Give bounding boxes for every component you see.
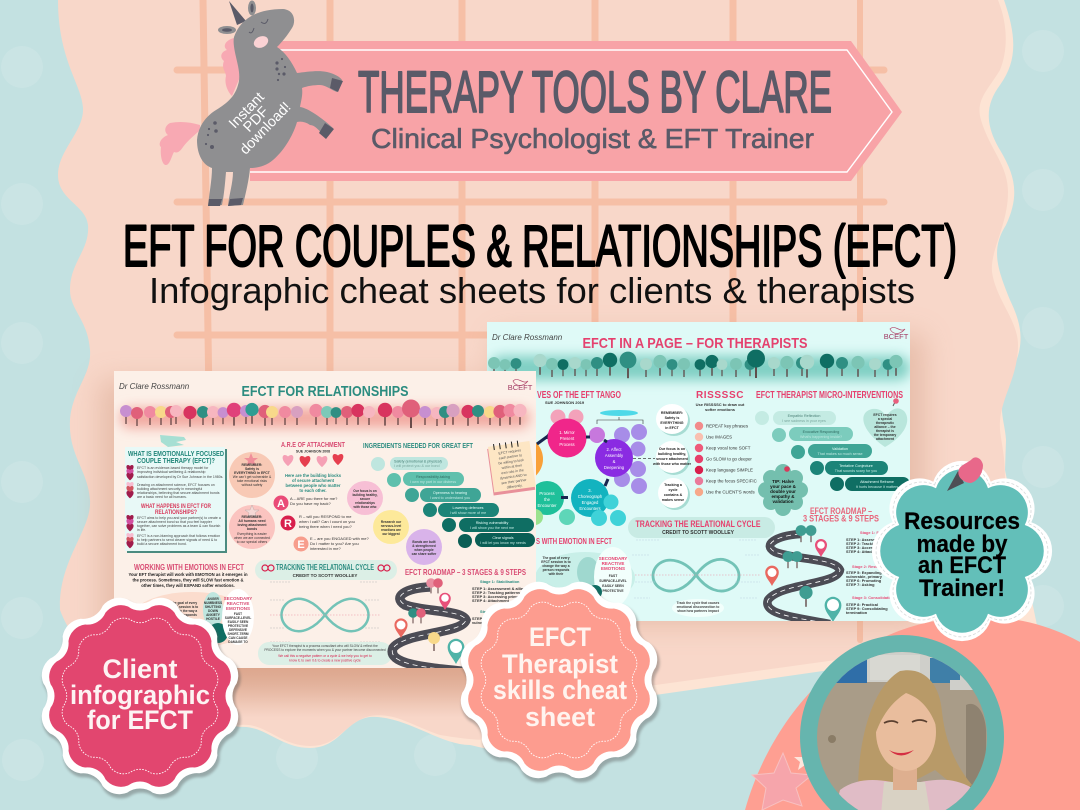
panel: micro-interventions: Evocative Responding bbox=[803, 430, 839, 434]
panel: working with emotions: EMOTIONS bbox=[226, 606, 250, 611]
panel: tracking the relational cycle: emotional disconnection to bbox=[677, 605, 719, 609]
panel: RISSSSC: RISSSSC bbox=[696, 390, 744, 401]
panel: what is EFCT: building attachment security in meaningful bbox=[137, 487, 202, 491]
diagram: five moves: 2. Affect bbox=[606, 447, 622, 452]
diagram: five moves: & bbox=[613, 459, 616, 464]
callouts: remember blobs: Safety is bbox=[245, 467, 259, 471]
icon: unicorn mascot bbox=[160, 0, 343, 206]
panel: working with emotion: FAST bbox=[609, 574, 617, 578]
brush mark bbox=[160, 435, 186, 447]
panel: working with emotion: PROTECTIVE bbox=[602, 589, 624, 593]
callout: tip flower: validation bbox=[772, 499, 794, 504]
diagram: five moves: Encounters bbox=[579, 506, 601, 511]
panel: what is EFCT: satisfaction developed by Dr Sue Johnson in the 1980s. bbox=[137, 475, 223, 479]
panel: what is EFCT: EFCT is an evidence-based therapy model for bbox=[137, 466, 209, 470]
subtitle: Infographic cheat sheets for clients & therapists bbox=[149, 270, 915, 311]
diagram: five moves: the bbox=[544, 497, 551, 502]
panel: micro-interventions: Attachment Reframe bbox=[860, 480, 894, 484]
panel: micro-interventions: I see sadness in your eyes bbox=[782, 419, 826, 423]
callout: sticky note: EFCT requires bbox=[498, 448, 522, 455]
panel: working with emotions: FAST bbox=[234, 612, 242, 616]
roadmap: EFCT ROADMAP – bbox=[810, 506, 872, 517]
heading: moves of the EFT tango: VES OF THE EFT TANGO bbox=[537, 389, 621, 401]
panel: what is EFCT: COUPLE THERAPY (EFCT)? bbox=[137, 456, 215, 465]
panel: working with emotions: Your EFT therapist will work with EMOTION as it emerges in bbox=[128, 572, 248, 577]
callout: therapeutic alliance heart: attachment bbox=[876, 437, 895, 441]
panel: RISSSSC: Use RISSSSC to draw out bbox=[696, 402, 745, 407]
panel: working with emotions: HOSTILE bbox=[206, 617, 220, 621]
panel: working with emotions: NUMBNESS bbox=[204, 601, 222, 605]
callouts: pastel blobs: Our focus is on bbox=[353, 489, 377, 493]
panel: working with emotions: other times, they will EXPAND softer emotions. bbox=[141, 583, 235, 588]
panel: micro-interventions: Tentative Conjecture bbox=[839, 464, 873, 468]
callouts: white remember blobs: Our focus is on bbox=[659, 447, 685, 451]
roadmap: vulnerable, primary bbox=[846, 574, 883, 579]
badge text: EFCT bbox=[529, 622, 591, 652]
panel: what is EFCT: EFCT is a non-blaming approach that follows emotion bbox=[137, 534, 220, 538]
panel: what is EFCT: RELATIONSHIPS? bbox=[155, 510, 197, 516]
roadmap: STEP 8: Practical bbox=[846, 602, 878, 607]
callout: tip flower: your pace & bbox=[770, 484, 797, 489]
roadmap: STEP 1: Assessment bbox=[846, 537, 885, 542]
roadmap: STEP 4: Attachment bbox=[846, 549, 884, 554]
panel: working with emotions: change the way a bbox=[171, 609, 197, 613]
callout: sticky note: be willing to look bbox=[498, 458, 524, 466]
panel: working with emotions: SURFACE-LEVEL bbox=[225, 616, 251, 620]
diagram: five moves: Encounter bbox=[537, 503, 557, 508]
panel: micro-interventions: That makes so much sense bbox=[817, 452, 863, 456]
panel: working with emotions: the process. Sometimes, they will SLOW fast emotion & bbox=[132, 578, 244, 582]
panel: micro-interventions: What's happening inside? bbox=[800, 435, 842, 439]
callouts: pastel blobs: & strengthened bbox=[412, 544, 436, 548]
text: instant download: Instant bbox=[226, 89, 268, 132]
callouts: white remember blobs: with those who matter bbox=[652, 462, 692, 466]
roadmap: vulnerable bbox=[472, 620, 492, 625]
diagram: five moves: 1. Mirror bbox=[559, 430, 575, 435]
panel: what is EFCT: to help partners to send clearer signals of need & to bbox=[137, 538, 217, 542]
roadmap: STEP 5: Expanding bbox=[472, 616, 508, 621]
callouts: pastel blobs: when people bbox=[413, 548, 434, 552]
panel: RISSSSC: softer emotions bbox=[705, 407, 736, 412]
callouts: pastel blobs: Research our bbox=[381, 520, 402, 524]
callout: therapeutic alliance heart bbox=[863, 398, 907, 447]
panel: RISSSSC: REPEAT key phrases bbox=[706, 424, 749, 428]
panel: tracking the relational cycle bbox=[628, 517, 775, 617]
roadmap: STEP 3: Accessing primary bbox=[472, 594, 523, 599]
callouts: remember blobs: All humans need bbox=[238, 519, 266, 523]
panel: A.R.E of attachment: when I call? Can I count on you bbox=[299, 519, 355, 524]
panel: working with emotions: DAMAGE TO bbox=[228, 640, 248, 644]
panel: what is EFCT: Drawing on attachment science, EFCT focuses on bbox=[137, 483, 215, 487]
panel: micro-interventions bbox=[755, 390, 910, 491]
callout: tip flower: TIP: Halve bbox=[772, 479, 794, 484]
panel: ingredients: INGREDIENTS NEEDED FOR GREAT EFT bbox=[363, 441, 473, 450]
roadmap: Stage 1: Stabilisation bbox=[860, 530, 900, 535]
signature: Dr Clare Rossmann bbox=[119, 382, 190, 391]
panel: tracking the relational cycle: TRACKING THE RELATIONAL CYCLE bbox=[636, 519, 760, 530]
panel: A.R.E of attachment: to each other. bbox=[299, 488, 327, 493]
panel: working with emotion: SURFACE-LEVEL bbox=[599, 579, 627, 583]
callout: sticky note: own role in the bbox=[501, 468, 524, 475]
panel: working with emotion: EASILY SEEN bbox=[602, 584, 624, 588]
panel: micro-interventions: It hurts because it matters bbox=[856, 485, 898, 489]
callouts: remember blobs: loving attachment bbox=[237, 523, 267, 527]
panel: tracking the relational cycle: TRACKING THE RELATIONAL CYCLE bbox=[276, 563, 374, 572]
roadmap: STEP 5: Expanding bbox=[846, 570, 882, 575]
badge: resources made by an EFCT trainer bbox=[872, 457, 1052, 641]
panel: what is EFCT: build a secure attachment bond. bbox=[137, 542, 187, 546]
icon: stars bbox=[752, 750, 816, 810]
panel: working with emotions: DOWN bbox=[208, 609, 219, 613]
panel: RISSSSC: Use IMAGES bbox=[706, 434, 732, 440]
callouts: pastel blobs: relationships bbox=[355, 501, 375, 505]
badge text: Client bbox=[102, 654, 178, 684]
panel: what is EFCT bbox=[125, 447, 227, 553]
panel: A.R.E of attachment: E bbox=[297, 539, 305, 551]
panel: working with emotion bbox=[535, 536, 635, 607]
panel: ingredients: Risking vulnerability bbox=[476, 521, 508, 525]
badge text bbox=[70, 654, 210, 735]
roadmap bbox=[765, 506, 900, 624]
panel: working with emotion: change the way a bbox=[542, 564, 570, 568]
panel: A.R.E of attachment: between people who matter bbox=[286, 483, 341, 488]
panel: working with emotions: ANGER bbox=[207, 597, 219, 601]
photo: portrait of Clare bbox=[800, 635, 1004, 810]
panel: tracking the relational cycle: We call this a negative pattern or a cycle & we help you to get to bbox=[278, 654, 372, 658]
diagram: five moves: Choreograph bbox=[578, 494, 603, 499]
panel: tracking the relational cycle bbox=[255, 560, 397, 665]
coral circle backdrop bbox=[745, 617, 1080, 810]
text: instant download: download! bbox=[237, 99, 294, 158]
panel: working with emotions: SECONDARY bbox=[224, 596, 252, 601]
callouts: remember blobs: take emotional risks bbox=[237, 479, 267, 483]
banner bbox=[250, 41, 902, 181]
callouts: pastel blobs: nervous-level bbox=[381, 524, 401, 528]
sheet title: EFCT IN A PAGE – FOR THERAPISTS bbox=[582, 335, 808, 352]
callouts: remember blobs: We can't get vulnerable & bbox=[233, 475, 272, 479]
panel: working with emotion: The goal of every bbox=[542, 556, 570, 560]
panel: RISSSSC bbox=[695, 390, 757, 496]
panel: what is EFCT: WHAT IS EMOTIONALLY FOCUSED bbox=[128, 449, 224, 458]
panel: working with emotions: EFCT session is to bbox=[170, 605, 198, 609]
panel: tracking the relational cycle: know it, to own it & to create a new positive cycle bbox=[289, 658, 361, 662]
panel: tracking the relational cycle: Track the cycle that causes bbox=[677, 601, 720, 605]
panel: working with emotions: DEFENSIVE bbox=[229, 628, 247, 632]
badge text: Trainer! bbox=[919, 575, 1005, 602]
callouts: remember blobs: bonds bbox=[247, 527, 257, 531]
callouts: remember blobs: REMEMBER: bbox=[242, 515, 262, 519]
panel: ingredients bbox=[363, 441, 535, 548]
panel: client sheet bbox=[114, 371, 536, 672]
callouts: white remember blobs: Safety is bbox=[665, 416, 679, 420]
panel: what is EFCT: secure attachment bond so that you feel happier bbox=[137, 520, 213, 524]
callouts: pastel blobs: with those who bbox=[352, 505, 377, 509]
diagram: five moves: Process bbox=[559, 442, 575, 447]
roadmap: STEP 3: Accessing bbox=[846, 545, 882, 550]
roadmap: Stage 2: bbox=[480, 609, 495, 614]
panel: therapist sheet: SUE JOHNSON 2019 bbox=[545, 400, 585, 405]
callouts: remember blobs: to our special others bbox=[237, 540, 268, 544]
callouts: white remember blobs: cycle bbox=[668, 488, 678, 492]
text: instant download bbox=[218, 81, 294, 158]
roadmap: Stage 1: Stabilisation bbox=[480, 579, 520, 584]
tree band bbox=[488, 350, 910, 380]
diagram: five moves: 3. bbox=[588, 488, 592, 493]
callout: sticky note: within at their bbox=[501, 463, 523, 470]
panel: working with emotions: PROTECTIVE bbox=[228, 624, 248, 628]
roadmap: EFCT ROADMAP – 3 STAGES & 9 STEPS bbox=[405, 567, 526, 577]
panel: what is EFCT: relationships, believing that secure attachment bonds bbox=[137, 491, 220, 495]
callout: sticky note: dynamics AND to bbox=[500, 473, 527, 480]
panel: ingredients: Responsibility-taking bbox=[416, 475, 450, 479]
panel: what is EFCT: are a basic need for all humans. bbox=[137, 495, 187, 499]
panel: working with emotions: EASILY SEEN bbox=[228, 620, 249, 624]
panel: tracking the relational cycle: CREDIT TO SCOTT WOOLLEY bbox=[293, 573, 357, 578]
callouts: remember blobs: REMEMBER: bbox=[242, 463, 262, 467]
panel: ingredients: Clear signals bbox=[492, 536, 514, 540]
logo: BCEFT: BCEFT bbox=[884, 332, 909, 341]
panel: ingredients: I will protect you & our bond bbox=[394, 464, 440, 468]
diagram: five moves bbox=[536, 410, 655, 526]
callouts: remember blobs: EVERYTHING in EFCT bbox=[234, 471, 271, 475]
callouts: remember blobs: when we are connected bbox=[234, 536, 270, 540]
panel: A.R.E of attachment: interested in me? bbox=[310, 546, 341, 551]
callout: sticky note: each partner to bbox=[499, 453, 522, 460]
panel: A.R.E of attachment: A.R.E OF ATTACHMENT bbox=[281, 440, 345, 449]
badge: therapist skills bbox=[446, 568, 674, 797]
panel: working with emotions: SHUTTING bbox=[205, 605, 222, 609]
panel: what is EFCT: WHAT HAPPENS IN EFCT FOR bbox=[141, 504, 212, 510]
roadmap: STEP 7: Asking bbox=[846, 582, 875, 587]
callouts: remember blobs bbox=[229, 452, 275, 549]
badge text: skills cheat bbox=[493, 675, 627, 705]
callouts: pastel blobs: secure bbox=[360, 497, 370, 501]
roadmap: 3 STAGES & 9 STEPS bbox=[803, 514, 879, 524]
panel: RISSSSC: Use the CLIENT'S words bbox=[706, 490, 755, 494]
callout: therapeutic alliance heart: therapeutic bbox=[876, 421, 894, 425]
panel: ingredients: Openness to hearing bbox=[433, 491, 467, 495]
callouts: remember blobs: Everything is easier bbox=[237, 532, 268, 536]
diagram: five moves: Present bbox=[560, 436, 575, 441]
roadmap: Stage 2: Restructuring bbox=[852, 564, 894, 569]
logo: BCEFT bbox=[884, 327, 908, 339]
panel: A.R.E of attachment: E – are you ENGAGED with me? bbox=[310, 536, 369, 541]
panel: working with emotions: The goal of every bbox=[171, 601, 197, 605]
panel: micro-interventions: EFCT THERAPIST MICRO-INTERVENTIONS bbox=[756, 390, 903, 401]
callout: sticky note: differently. bbox=[507, 483, 523, 490]
panel: A.R.E of attachment: Do I matter to you? Are you bbox=[310, 541, 359, 546]
panel: working with emotion: SECONDARY bbox=[599, 556, 627, 561]
tree band bbox=[120, 400, 530, 428]
panel: ingredients: Lowering defences bbox=[453, 506, 484, 510]
plaid grid lines bbox=[177, 0, 884, 640]
banner subtitle: Clinical Psychologist & EFT Trainer bbox=[371, 123, 814, 154]
panel: working with emotion: EMOTIONS bbox=[601, 566, 625, 571]
text: instant download: PDF bbox=[240, 104, 272, 136]
diagram: five moves: Engaged bbox=[582, 500, 599, 505]
panel: working with emotion: S WITH EMOTION IN EFCT bbox=[536, 536, 613, 546]
panel: A.R.E of attachment: of secure attachment bbox=[292, 478, 335, 483]
panel: ingredients: I will show you the next me bbox=[470, 526, 514, 530]
panel: A.R.E of attachment bbox=[274, 440, 369, 552]
callouts: white remember blobs: secure attachment bbox=[656, 457, 689, 461]
panel: A.R.E of attachment: R – will you RESPOND to me bbox=[299, 514, 352, 519]
roadmap: termination bbox=[846, 610, 868, 615]
panel: micro-interventions: Validation bbox=[832, 447, 848, 451]
panel: what is EFCT: EFCT aims to help you and your partner(s) to create a bbox=[137, 516, 221, 520]
panel: ingredients: Safety (emotional & physical) bbox=[394, 460, 442, 464]
panel: A.R.E of attachment: SUE JOHNSON 2008 bbox=[296, 450, 330, 454]
panel: working with emotion: person responds bbox=[543, 568, 570, 572]
badge text: for EFCT bbox=[87, 705, 193, 735]
badge text: sheet bbox=[525, 702, 595, 732]
panel: what is EFCT: in life. bbox=[137, 528, 146, 532]
panel: working with emotions bbox=[128, 563, 254, 648]
callouts: pastel blobs: Bonds are built bbox=[412, 540, 437, 544]
callouts: pastel blobs: reactions are bbox=[381, 528, 401, 532]
panel: A.R.E of attachment: A bbox=[277, 498, 285, 510]
callouts: pastel blobs bbox=[347, 481, 442, 565]
panel: working with emotions: WORKING WITH EMOTIONS IN EFCT bbox=[134, 563, 244, 572]
panel: ingredients: I own my part in our distress bbox=[410, 480, 456, 484]
panel: therapist sheet bbox=[487, 322, 910, 624]
callout: therapeutic alliance heart: the temporary bbox=[874, 433, 896, 437]
panel: RISSSSC: Go SLOW to go deeper bbox=[706, 456, 752, 462]
roadmap: STEP 4: Attachment bbox=[472, 598, 510, 603]
panel: A.R.E of attachment: being there when I need you? bbox=[299, 524, 352, 529]
badge text bbox=[493, 622, 627, 732]
badge text bbox=[904, 508, 1020, 602]
panel: what is EFCT: improving individual wellbeing & relationship bbox=[137, 470, 206, 474]
callout: therapeutic alliance heart: therapist is bbox=[876, 429, 894, 433]
callout: therapeutic alliance heart: alliance – the bbox=[874, 425, 896, 429]
callout: tip flower bbox=[758, 464, 808, 516]
panel: A.R.E of attachment: Do you have my back? bbox=[290, 501, 331, 506]
sheet shadows bbox=[100, 335, 925, 718]
callout: tip flower: double your bbox=[770, 489, 796, 494]
panel: working with emotion: REACTIVE bbox=[602, 561, 624, 566]
callouts: white remember blobs: contains & bbox=[664, 493, 683, 497]
callouts: white remember blobs: REMEMBER: bbox=[661, 411, 683, 415]
callouts: white remember blobs bbox=[652, 404, 692, 510]
panel: RISSSSC: Keep language SIMPLE bbox=[706, 468, 753, 472]
badge: client infographic bbox=[27, 584, 255, 810]
badge text: infographic bbox=[70, 680, 210, 710]
callouts: white remember blobs: in EFCT bbox=[665, 426, 680, 430]
callout: therapeutic alliance heart: EFCT requires bbox=[873, 413, 897, 417]
panel: working with emotions: person responds bbox=[171, 613, 197, 617]
panel: A.R.E of attachment: R bbox=[284, 518, 292, 530]
panel: tracking the relational cycle: PROCESS to explore the moments when you & your partner become disconnected bbox=[264, 648, 386, 652]
callout: sticky note: see their partner bbox=[501, 478, 528, 485]
roadmap: STEP 1: Assessment & alliance bbox=[472, 586, 531, 591]
panel: working with emotions: SHORT-TERM bbox=[227, 632, 249, 636]
badge text: Therapist bbox=[502, 649, 618, 679]
roadmap: STEP 2: Tracking bbox=[846, 541, 878, 546]
panel: working with emotion: with their bbox=[548, 572, 564, 576]
callouts: white remember blobs: EVERYTHING bbox=[660, 421, 684, 425]
panel: tracking the relational cycle: Your EFCT therapist is a process consultant who will SLOW & reflect the bbox=[272, 644, 378, 648]
callouts: pastel blobs: building healthy, bbox=[352, 493, 378, 497]
roadmap: STEP 2: Tracking patterns bbox=[472, 590, 520, 595]
panel: working with emotions: CAN CAUSE bbox=[229, 636, 247, 640]
callouts: remember blobs: without safety bbox=[242, 483, 263, 487]
callouts: pastel blobs: can share softer bbox=[412, 552, 437, 556]
roadmap: STEP 9: Consolidating bbox=[846, 606, 888, 611]
callouts: white remember blobs: building healthy, bbox=[658, 452, 686, 456]
diagram: five moves: Deepening bbox=[604, 465, 625, 470]
badge text: Resources bbox=[904, 508, 1020, 535]
callouts: pastel blobs: our biggest bbox=[382, 532, 401, 536]
panel: working with emotions: REACTIVE bbox=[227, 601, 249, 606]
panel: micro-interventions: Empathic Reflection bbox=[788, 414, 820, 418]
sheet title: EFCT FOR RELATIONSHIPS bbox=[242, 383, 408, 400]
roadmap bbox=[392, 567, 531, 672]
panel: RISSSSC: Keep vocal tone SOFT bbox=[706, 446, 751, 450]
panel: A.R.E of attachment: A – ARE you there for me? bbox=[290, 496, 338, 501]
logo: BCEFT bbox=[508, 379, 532, 390]
callout: tip flower: empathy & bbox=[771, 494, 795, 499]
callouts: white remember blobs: Tracking a bbox=[664, 483, 683, 487]
panel: RISSSSC: Keep the focus SPECIFIC bbox=[706, 478, 757, 484]
diagram: five moves: Assembly bbox=[605, 453, 624, 458]
roadmap: Stage 3: Consolidation bbox=[852, 595, 895, 600]
callouts: white remember blobs: makes sense bbox=[662, 498, 684, 502]
panel: tracking the relational cycle: show how partners impact bbox=[677, 609, 720, 613]
panel: ingredients: I will let you know my needs bbox=[480, 541, 526, 545]
diagram: five moves: Process bbox=[539, 491, 555, 496]
callout: sticky note bbox=[487, 439, 536, 496]
badge text: an EFCT bbox=[918, 552, 1006, 579]
callout: therapeutic alliance heart: a special bbox=[878, 417, 892, 421]
panel: what is EFCT: together, can solve problems as a team & can flourish bbox=[137, 524, 220, 528]
badge text: made by bbox=[916, 531, 1008, 558]
panel: tracking the relational cycle: CREDIT TO SCOTT WOOLLEY bbox=[662, 530, 735, 536]
panel: A.R.E of attachment: Here are the building blocks bbox=[285, 473, 342, 478]
icon: pin bbox=[947, 457, 983, 491]
panel: micro-interventions: That sounds scary for you bbox=[835, 469, 877, 473]
roadmap: STEP 6: Promoting bbox=[846, 578, 882, 583]
panel: ingredients: I want to understand you bbox=[430, 496, 470, 500]
panel: working with emotions: ANXIETY bbox=[206, 613, 221, 617]
logo: BCEFT: BCEFT bbox=[508, 383, 533, 392]
signature: Dr Clare Rossmann bbox=[492, 333, 563, 342]
panel: working with emotion: EFCT session is to bbox=[541, 560, 571, 564]
panel: ingredients: I will show more of me bbox=[450, 511, 486, 515]
